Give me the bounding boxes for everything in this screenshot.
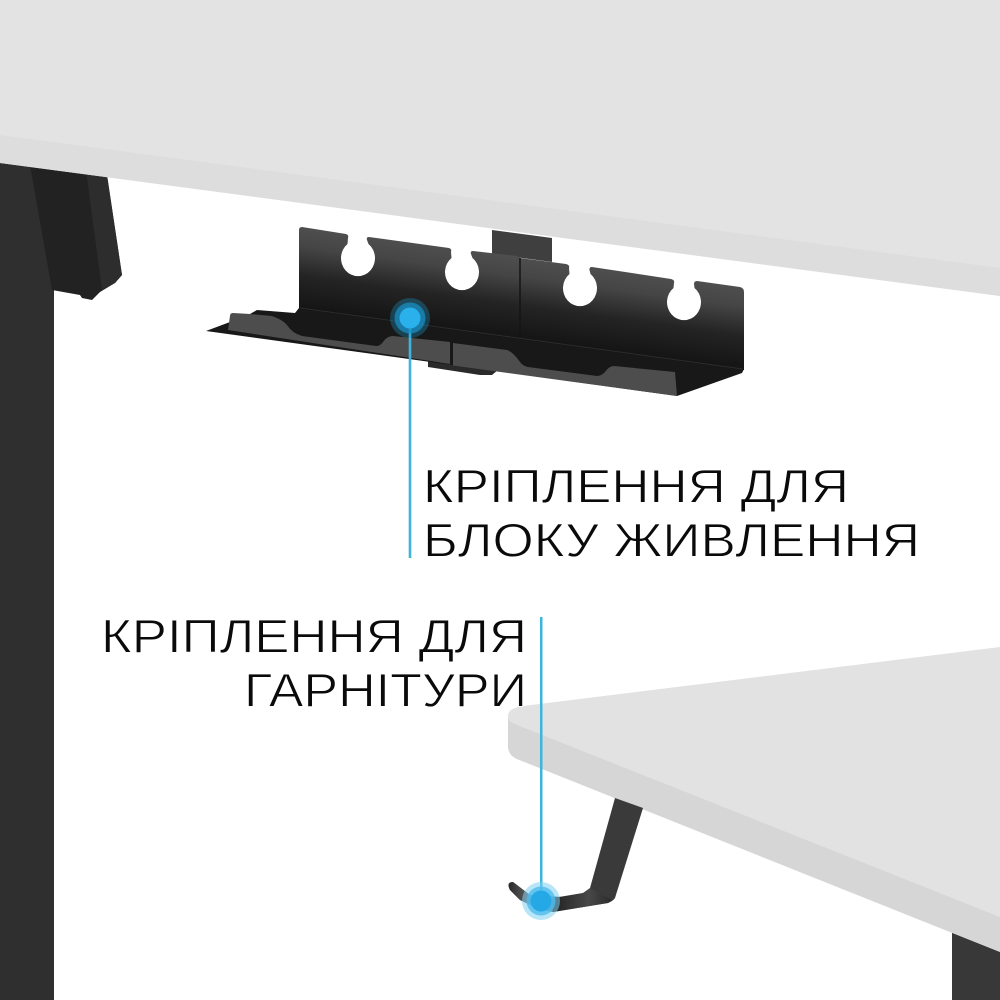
label: headset mount: КРІПЛЕННЯ ДЛЯ bbox=[101, 610, 527, 664]
tray front lip, left section bbox=[228, 313, 450, 364]
label: power supply mount: БЛОКУ ЖИВЛЕННЯ bbox=[423, 514, 920, 568]
lower mount plate bbox=[428, 361, 498, 375]
table top: lower bbox=[508, 647, 1000, 952]
label: headset mount bbox=[101, 610, 527, 718]
headset hook bbox=[509, 798, 643, 912]
tray floor bbox=[206, 308, 744, 396]
tray front lip, right section bbox=[453, 343, 677, 396]
table top: upper bbox=[0, 0, 1000, 296]
label: power supply mount bbox=[423, 460, 920, 568]
fold line bbox=[300, 308, 743, 369]
label: headset mount: ГАРНІТУРИ bbox=[244, 664, 527, 718]
table leg: left bbox=[0, 155, 122, 1000]
cable tray bracket: power supply mount bbox=[206, 227, 744, 396]
callout pointer: power supply mount bbox=[390, 298, 430, 558]
upright mount bbox=[492, 230, 552, 262]
table leg: right bbox=[952, 930, 1000, 1000]
back plate with keyhole slots bbox=[299, 227, 744, 370]
callout pointer: headset hook bbox=[522, 617, 560, 920]
label: power supply mount: КРІПЛЕННЯ ДЛЯ bbox=[423, 460, 849, 514]
joint line bbox=[519, 258, 521, 340]
